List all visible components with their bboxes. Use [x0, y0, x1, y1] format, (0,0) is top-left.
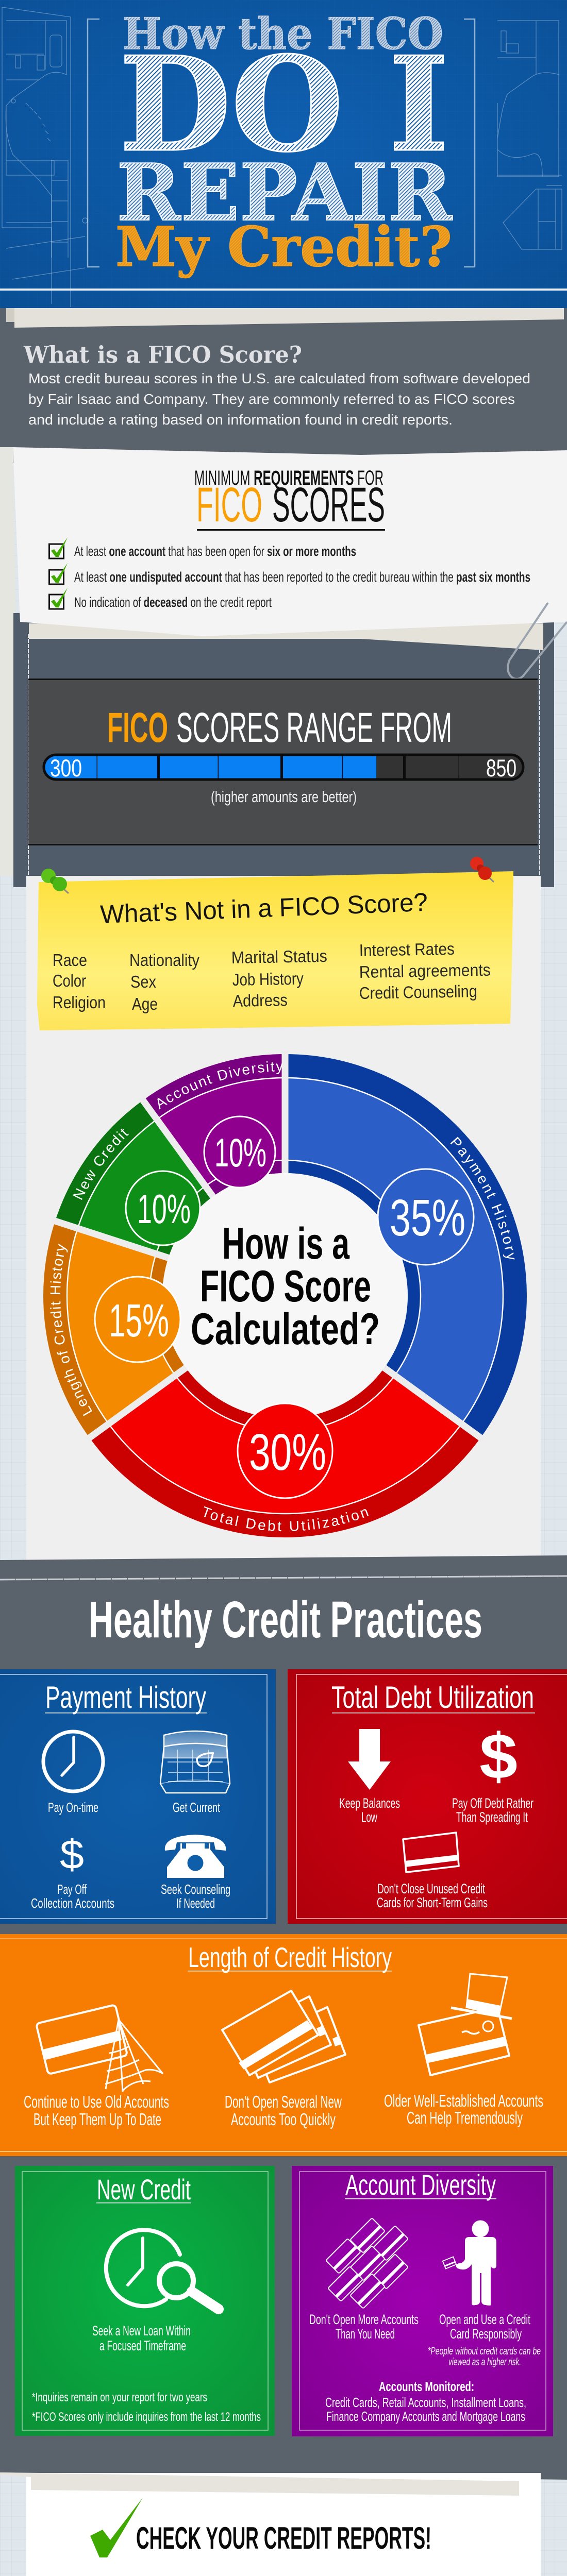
list column 3: Address: [232, 990, 288, 1010]
center title: How is a: [222, 1219, 350, 1268]
segment: account diversity 10%: [0, 975, 567, 1617]
label: total debt utilization: Total Debt Utilization: [204, 1506, 369, 1531]
icon: calendar: [160, 1731, 230, 1793]
icon: green pin: [41, 869, 69, 893]
label: seek a new loan: [92, 2323, 191, 2353]
label: continue to use: But Keep Them Up To Date: [34, 2110, 161, 2129]
note: higher amounts: (higher amounts are better): [211, 788, 357, 806]
heading: What is a FICO Score?: [23, 341, 302, 368]
label: don't close: [377, 1881, 488, 1910]
icon: large dollar sign: $: [479, 1721, 518, 1792]
section: healthy credit practices: [0, 1555, 567, 2480]
heading: what's not in a FICO score: What's Not in a FICO Score?: [99, 888, 428, 929]
lower paper sheet: [26, 876, 541, 1564]
note: inquiries: *Inquiries remain on your report for two years: [32, 2391, 207, 2404]
panel: length of credit history: [0, 1934, 567, 2156]
label: don't open several: Accounts Too Quickly: [231, 2110, 336, 2129]
badge: 15%: [95, 1277, 180, 1362]
value 850: 850: [486, 754, 516, 782]
score range bar: [44, 754, 523, 782]
blueprint drawing right: [497, 21, 562, 249]
badge: new credit 10%: [126, 1171, 200, 1245]
segment: total debt utilization 30%: [0, 975, 567, 1617]
label: continue to use: [24, 2092, 169, 2129]
note: inquiries: *FICO Scores only include inquiries from the last 12 months: [32, 2410, 261, 2424]
check item 2: [49, 563, 530, 585]
label: pay on-time: Pay On-time: [48, 1800, 98, 1815]
title line: My Credit?: My Credit?: [115, 214, 452, 279]
panel: check your credit reports: [0, 2472, 541, 2576]
label: don't open several: [225, 2092, 342, 2129]
list column 1: Color: [53, 971, 86, 990]
title line: REPAIR: REPAIR: [116, 146, 453, 239]
value 300: 300: [50, 754, 82, 782]
label: pay off debt: Than Spreading It: [456, 1809, 528, 1825]
note: people without cards: viewed as a higher risk.: [448, 2357, 521, 2368]
icon: big green check: [90, 2498, 143, 2557]
badge: 35%: 35%: [390, 1189, 465, 1247]
icon: clock with magnifier: [106, 2230, 219, 2309]
icon: red pin: [470, 857, 494, 882]
label: seek counseling: [161, 1882, 230, 1911]
label: open and use: Card Responsibly: [450, 2326, 522, 2342]
icon: dollar sign: $: [60, 1832, 84, 1877]
panel heading: Account Diversity: [345, 2168, 496, 2201]
panel heading: Length of Credit History: [188, 1941, 392, 1973]
segment: new credit 10%: [0, 1006, 567, 1585]
panel: new credit: [15, 2166, 275, 2436]
list column 4: Interest Rates: [359, 939, 455, 960]
label: pay off collection accounts: Pay Off: [57, 1882, 87, 1897]
center title: FICO Score: [200, 1262, 371, 1311]
check item 2: At least one undisputed account that has been reported to the credit bureau within the past six months: [74, 569, 530, 585]
label: payment history: Payment History: [451, 1137, 514, 1260]
title line: How the FICO: How the FICO: [123, 8, 443, 59]
icon: card with cobweb: [36, 2005, 163, 2092]
badge: 35%: [378, 1169, 474, 1265]
torn paper strip: [6, 308, 564, 328]
label: seek a new loan: Seek a New Loan Within: [92, 2323, 191, 2338]
chart: FICO score donut: [43, 1054, 527, 1537]
label: open and use: [439, 2312, 530, 2342]
label: seek counseling: Seek Counseling: [161, 1882, 230, 1897]
list column 3: [231, 946, 327, 1010]
section: what is a FICO score: [0, 308, 567, 463]
label: new credit: New Credit: [73, 1128, 129, 1200]
label: continue to use: Continue to Use Old Accounts: [24, 2092, 169, 2111]
badge: 30%: 30%: [249, 1423, 326, 1481]
label: pay off debt: [452, 1795, 533, 1825]
icon: clock: [43, 1732, 103, 1791]
intro paragraph: by Fair Isaac and Company. They are commonly referred to as FICO scores: [28, 391, 515, 407]
label: account diversity: Account Diversity: [157, 1061, 283, 1110]
label: pay off collection accounts: Collection Accounts: [31, 1895, 114, 1911]
panel heading: Payment History: [45, 1680, 206, 1715]
list column 2: Age: [132, 994, 158, 1013]
list column 2: [129, 951, 199, 1013]
label: keep balances low: Keep Balances: [339, 1795, 400, 1811]
accounts monitored: [325, 2379, 526, 2424]
label: seek counseling: If Needed: [176, 1895, 215, 1911]
list column 4: Credit Counseling: [359, 981, 477, 1003]
list column 4: Rental agreements: [359, 960, 491, 981]
list column 2: Nationality: [129, 951, 199, 970]
intro paragraph: and include a rating based on information found in credit reports.: [28, 412, 453, 428]
panel: sticky note: [37, 871, 513, 1030]
list column 3: Job History: [232, 969, 304, 989]
label: keep balances low: Low: [361, 1809, 377, 1825]
heading: FICO scores range from: [107, 704, 452, 751]
center title: [191, 1219, 380, 1354]
list column 2: Sex: [130, 972, 156, 991]
list column 1: Race: [53, 951, 87, 970]
list column 1: Religion: [53, 993, 106, 1012]
badge: new credit 10%: 10%: [137, 1186, 191, 1232]
panel: account diversity: [292, 2166, 553, 2436]
slate backing panel: [0, 447, 554, 887]
heading: FICO: FICO: [196, 478, 262, 532]
badge: account diversity 10%: 10%: [214, 1130, 266, 1175]
icon: many cards: [326, 2218, 408, 2309]
intro paragraph: Most credit bureau scores in the U.S. are calculated from software developed: [28, 370, 530, 386]
bracket right: [464, 19, 475, 267]
check item 3: [49, 588, 272, 610]
heading: SCORES: SCORES: [272, 478, 385, 532]
heading: FICO scores range from: FICO: [107, 704, 168, 751]
panel: FICO score range: [28, 679, 538, 845]
label: don't open more: Don't Open More Accounts: [309, 2312, 419, 2327]
icon: three cards: [222, 1991, 345, 2082]
bracket left: [88, 19, 99, 267]
icon: down arrow: [348, 1729, 391, 1790]
list column 4: [359, 939, 491, 1003]
icon: credit card: [403, 1833, 459, 1872]
label: don't open several: Don't Open Several New: [225, 2092, 342, 2111]
header: blueprint title banner: [0, 0, 567, 308]
label: don't close: Don't Close Unused Credit: [377, 1881, 485, 1896]
note: inquiries: [32, 2391, 261, 2424]
label: get current: Get Current: [173, 1800, 221, 1815]
icon: telephone: [165, 1835, 226, 1878]
label: don't close: Cards for Short-Term Gains: [377, 1895, 488, 1910]
intro paragraph: [28, 370, 530, 428]
note: people without cards: [428, 2346, 541, 2368]
segment: payment history 35%: [55, 1066, 515, 1526]
label: don't open more: [309, 2312, 419, 2342]
label: keep balances low: [339, 1795, 400, 1825]
panel: total debt utilization: [288, 1669, 567, 1924]
heading: minimum requirements: MINIMUM REQUIREMENTS FOR: [194, 467, 383, 489]
label: pay off collection accounts: [31, 1882, 114, 1911]
label: don't open more: Than You Need: [336, 2326, 395, 2342]
icon: person holding card: [443, 2221, 496, 2306]
icon: paperclip: [508, 603, 567, 679]
check item 3: No indication of deceased on the credit report: [74, 595, 272, 610]
panel: minimum requirements paper: [13, 447, 567, 636]
icon: card with top hat: [419, 1974, 512, 2075]
badge: 15%: 15%: [109, 1295, 169, 1347]
blueprint drawing left: [2, 7, 88, 307]
check item 1: [49, 537, 356, 559]
title line: DO I: DO I: [119, 28, 449, 181]
list column 3: Marital Status: [231, 946, 327, 967]
list column 1: [53, 951, 106, 1012]
label: seek a new loan: a Focused Timeframe: [99, 2338, 186, 2353]
label: length of credit history: Length of Credit History: [50, 1244, 92, 1416]
center title: Calculated?: [191, 1304, 380, 1354]
badge: 30%: [238, 1403, 332, 1498]
check item 1: At least one account that has been open for six or more months: [74, 544, 356, 559]
accounts monitored: Accounts Monitored:: [379, 2379, 474, 2394]
panel: payment history: [0, 1669, 276, 1924]
label: older accounts: [384, 2091, 543, 2127]
segment: length of credit history 15%: [0, 975, 567, 1617]
badge: account diversity 10%: [204, 1116, 275, 1188]
panel heading: New Credit: [97, 2173, 191, 2206]
